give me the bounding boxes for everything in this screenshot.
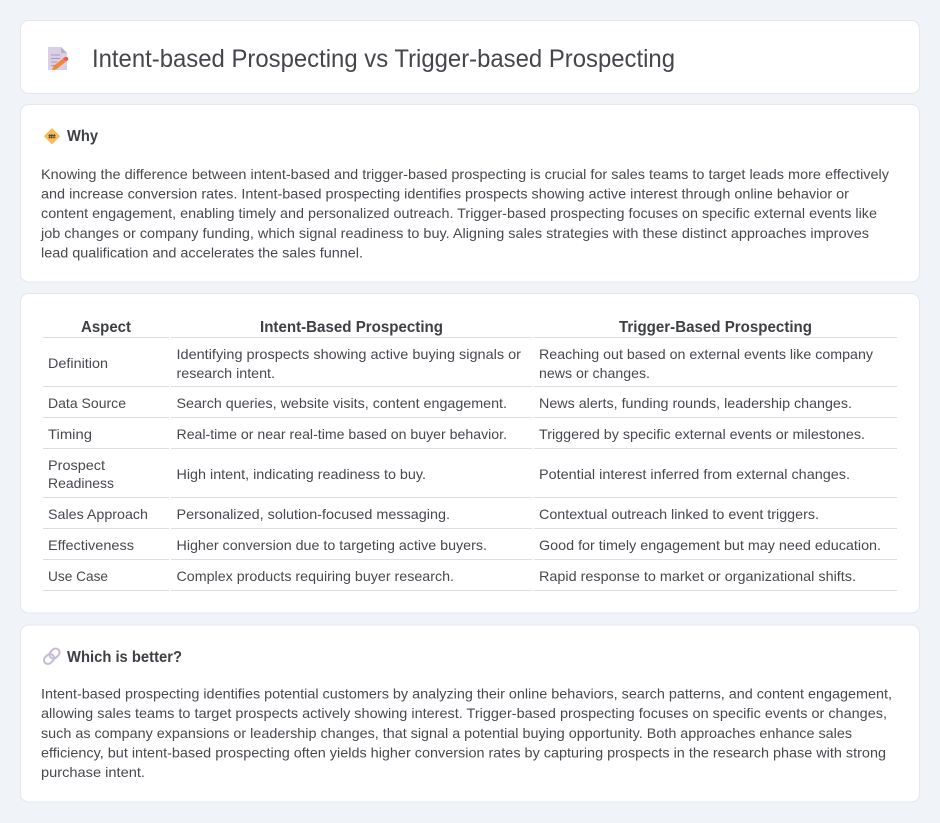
text block: which is better paragraph: purchase intent. bbox=[41, 764, 145, 780]
row: sales approach: Contextual outreach linked to event triggers. bbox=[539, 506, 819, 522]
panel: title header bbox=[20, 20, 920, 94]
table header row: Intent-Based Prospecting bbox=[260, 319, 443, 336]
text block: which is better paragraph: allowing sales teams to target prospects actively showing interest. Trigger-based prospecting focuses on specific events or changes, bbox=[41, 705, 887, 721]
text block: why paragraph bbox=[40, 166, 889, 260]
row: definition: Identifying prospects showing active buying signals or bbox=[176, 346, 521, 362]
row: definition: Reaching out based on external events like company bbox=[539, 346, 873, 362]
row: prospect readiness: Readiness bbox=[48, 475, 114, 491]
text block: which is better paragraph: efficiency, but intent-based prospecting often yields higher conversion rates by capturing prospects in the research phase with strong bbox=[41, 744, 886, 760]
row: definition: Definition bbox=[48, 355, 108, 371]
text block: why paragraph: job changes or company funding, which signal readiness to buy. Aligning sales strategies with these distinct approaches improves bbox=[40, 225, 869, 241]
row: data source: News alerts, funding rounds, leadership changes. bbox=[539, 395, 852, 411]
row: effectiveness bbox=[48, 537, 881, 553]
row: effectiveness: Higher conversion due to targeting active buyers. bbox=[176, 537, 487, 553]
row: definition: news or changes. bbox=[539, 365, 650, 381]
row: timing: Timing bbox=[48, 426, 92, 442]
icon: document with pencil bbox=[48, 47, 68, 70]
table header row: Aspect bbox=[81, 319, 132, 336]
row: sales approach bbox=[48, 506, 819, 522]
table row lines bbox=[43, 338, 897, 590]
row: timing bbox=[48, 426, 865, 442]
row: data source: Search queries, website visits, content engagement. bbox=[176, 395, 507, 411]
text block: why paragraph: and increase conversion rates. Intent-based prospecting identifies prospects showing active interest through online behavior or bbox=[41, 186, 849, 202]
row: prospect readiness: Prospect bbox=[48, 457, 105, 473]
row: timing: Triggered by specific external events or milestones. bbox=[539, 426, 865, 442]
text block: which is better paragraph: Intent-based prospecting identifies potential customers by analyzing their online behaviors, search patterns, and content engagement, bbox=[41, 686, 892, 702]
row: effectiveness: Effectiveness bbox=[48, 537, 134, 553]
row: timing: Real-time or near real-time based on buyer behavior. bbox=[176, 426, 507, 442]
heading: why: Why bbox=[67, 128, 98, 145]
text block: which is better paragraph bbox=[41, 686, 892, 780]
row: data source: Data Source bbox=[48, 395, 126, 411]
row: prospect readiness bbox=[48, 457, 850, 491]
row: use case: Complex products requiring buyer research. bbox=[176, 568, 454, 584]
table header row: Trigger-Based Prospecting bbox=[619, 319, 812, 336]
icon: link bbox=[42, 647, 61, 666]
row: use case: Rapid response to market or organizational shifts. bbox=[539, 568, 856, 584]
panel: comparison table bbox=[20, 294, 920, 613]
row: definition bbox=[48, 346, 873, 381]
row: use case bbox=[48, 568, 856, 584]
table header row bbox=[81, 319, 812, 336]
row: prospect readiness: High intent, indicating readiness to buy. bbox=[176, 466, 426, 482]
icon: warning diamond bbox=[44, 128, 60, 144]
text block: why paragraph: Knowing the difference between intent-based and trigger-based prospecting is crucial for sales teams to target leads more effectively bbox=[41, 166, 889, 182]
title: Intent-based Prospecting vs Trigger-based Prospecting bbox=[92, 45, 675, 73]
text block: why paragraph: lead qualification and accelerates the sales funnel. bbox=[41, 244, 363, 260]
row: effectiveness: Good for timely engagement but may need education. bbox=[539, 537, 881, 553]
row: sales approach: Personalized, solution-focused messaging. bbox=[176, 506, 450, 522]
row: data source bbox=[48, 395, 852, 411]
row: sales approach: Sales Approach bbox=[48, 506, 148, 522]
row: prospect readiness: Potential interest inferred from external changes. bbox=[539, 466, 850, 482]
panel: why bbox=[20, 104, 920, 282]
heading: which is better: Which is better? bbox=[67, 649, 182, 666]
text block: which is better paragraph: such as company expansions or leadership changes, that signal a potential buying opportunity. Both approaches enhance sales bbox=[41, 725, 852, 741]
panel: which is better bbox=[20, 625, 920, 802]
row: use case: Use Case bbox=[48, 568, 108, 584]
text block: why paragraph: content engagement, enabling timely and personalized outreach. Trigger-based prospecting focuses on specific external events like bbox=[41, 205, 877, 221]
row: definition: research intent. bbox=[176, 365, 275, 381]
